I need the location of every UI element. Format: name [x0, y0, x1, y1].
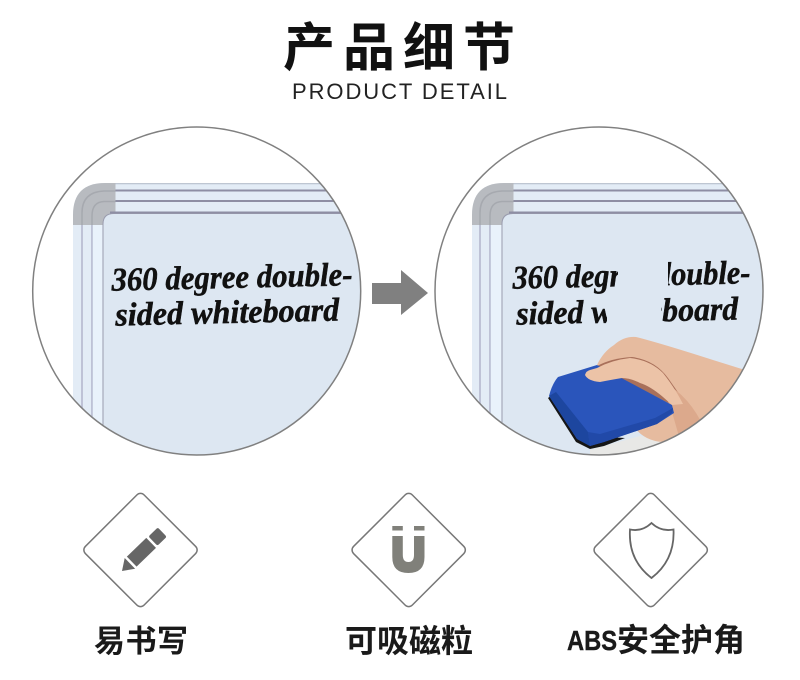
circle outline: [33, 127, 361, 455]
title: 产品细节: [283, 20, 515, 78]
feature: ABS corner protection: [567, 491, 745, 658]
feature: easy to write: [82, 491, 199, 659]
index finger: [585, 358, 683, 405]
partly erased handwritten text: sided whiteboard: [515, 292, 739, 333]
arrow: [372, 270, 428, 315]
eraser: [548, 365, 674, 449]
panel: whiteboard with writing: [30, 125, 370, 460]
label: 安全护角: [617, 622, 745, 658]
panel: whiteboard being erased: [430, 125, 770, 470]
diamond frame: [82, 491, 199, 609]
whiteboard frame: [73, 183, 370, 460]
handwritten text: 360 degree double-: [110, 257, 353, 299]
partly erased handwritten text: 360 degree double-: [511, 255, 751, 297]
hand: [597, 336, 742, 442]
diamond frame: [592, 491, 709, 609]
icon: pencil: [117, 527, 167, 576]
subtitle: PRODUCT DETAIL: [292, 79, 507, 104]
surface shadow: [590, 436, 660, 454]
icon: magnet: [392, 526, 424, 573]
partly erased handwritten text: [512, 260, 750, 326]
label: ABS: [567, 625, 617, 656]
feature: magnetic: [345, 491, 473, 659]
diamond frame: [350, 491, 467, 609]
circle outline: [435, 127, 763, 455]
whiteboard frame: [472, 183, 770, 460]
label: 可吸磁粒: [345, 623, 473, 659]
handwritten text: [110, 257, 354, 334]
label: 易书写: [94, 624, 188, 659]
handwritten text: sided whiteboard: [114, 293, 340, 334]
icon: shield: [630, 523, 674, 578]
